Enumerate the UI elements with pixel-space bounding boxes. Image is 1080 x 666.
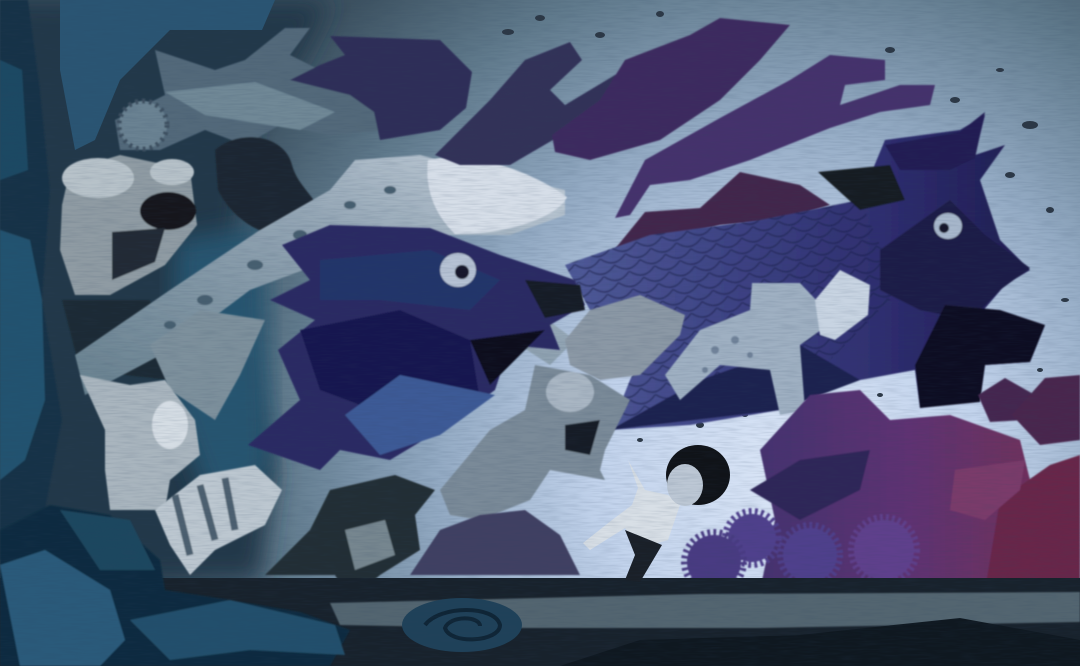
foreground ground band — [0, 578, 1080, 666]
top-left bird creature — [115, 28, 472, 238]
icon: spiky purple bird 1 — [687, 535, 741, 589]
icon: bird spiral tail — [119, 101, 167, 149]
tree trunk on the left — [0, 0, 62, 560]
icon: beast eye — [934, 213, 962, 239]
grey fish-faced dog — [440, 365, 630, 520]
pale creatures between the two giants — [565, 270, 870, 415]
icon: spiky purple bird 4 — [854, 520, 914, 580]
left pale creature in the mist — [150, 310, 265, 420]
shadow creature behind wolf — [410, 510, 580, 575]
left screaming creature — [60, 155, 197, 295]
tree roots — [0, 505, 350, 666]
purple creature crowd — [687, 390, 1080, 590]
dark forest backdrop — [0, 0, 330, 580]
large horned beast on the right — [565, 112, 1045, 430]
flying debris specks — [502, 11, 1069, 442]
icon: spiky purple bird 3 — [783, 528, 837, 582]
large navy bear in the center — [248, 225, 585, 470]
icon: spiky purple bird 2 — [728, 514, 776, 562]
white striped bug — [155, 465, 282, 575]
top purple flying creatures — [435, 18, 935, 255]
small running wolf — [265, 475, 435, 600]
icon: bear eye — [440, 253, 476, 287]
white spiky fox — [80, 375, 200, 510]
spiral on the ground — [402, 598, 522, 652]
far-right floating creatures — [978, 375, 1080, 445]
boy running away — [583, 445, 730, 582]
white foam wave creature — [75, 155, 575, 395]
